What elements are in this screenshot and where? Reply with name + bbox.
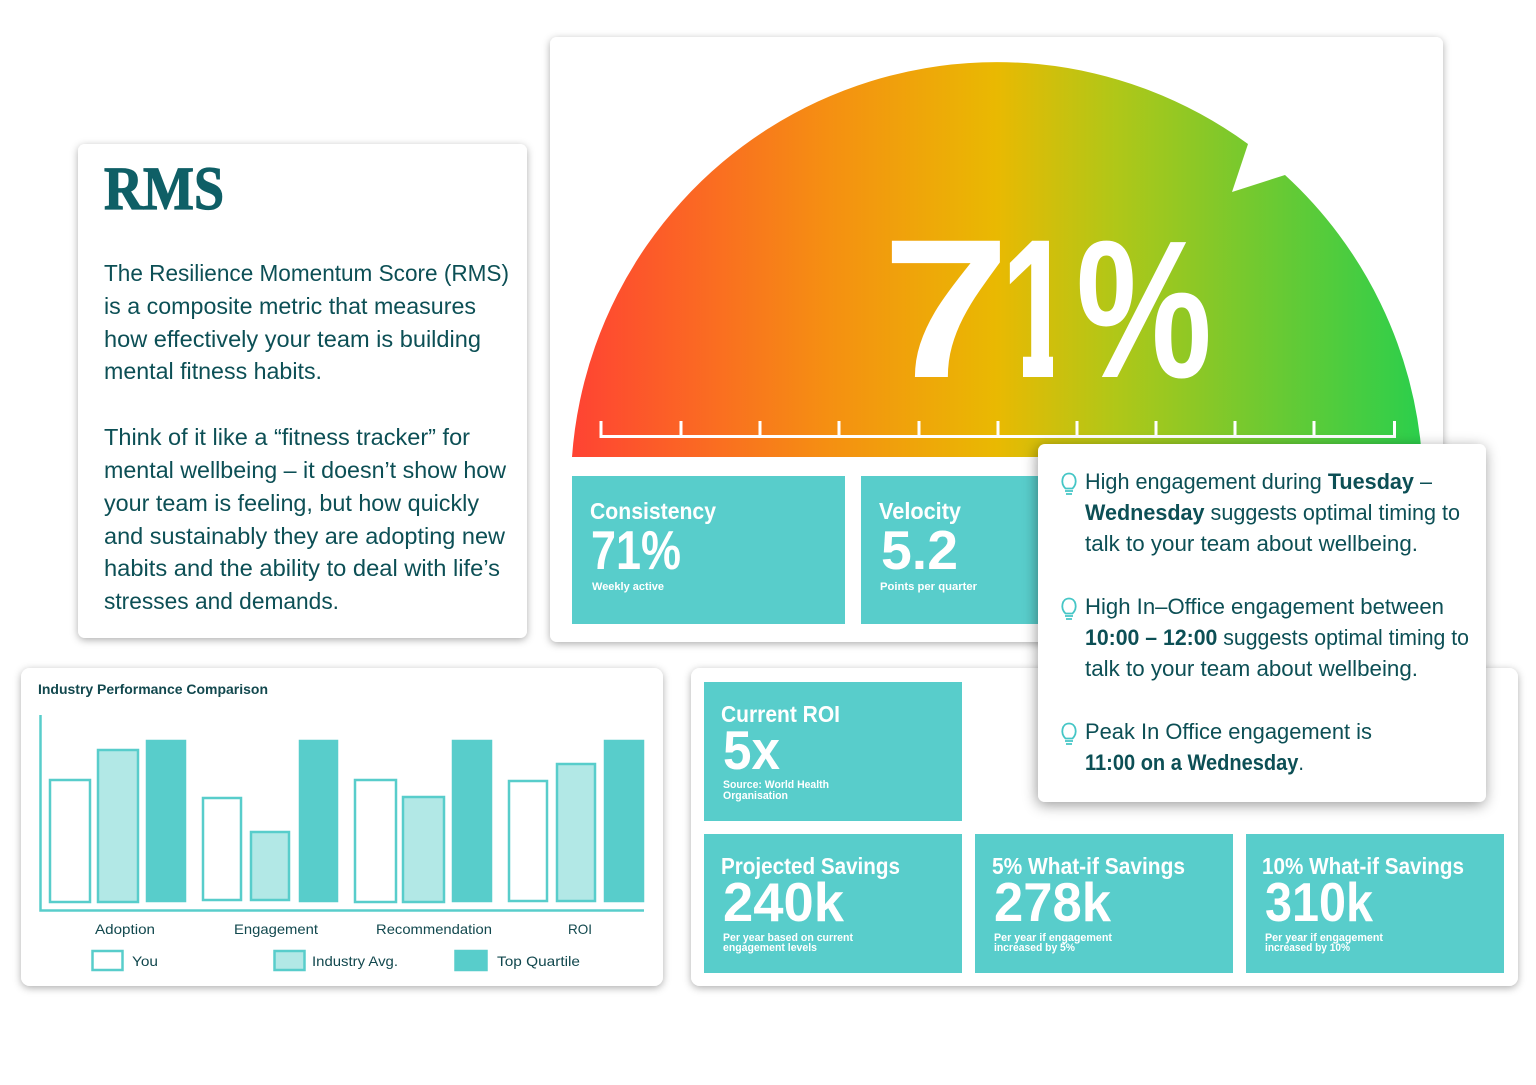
icon: lightbulb 2	[1062, 598, 1076, 619]
tile: current ROI: Organisation	[723, 790, 788, 802]
RMS description text	[104, 260, 509, 614]
chart card background	[21, 668, 663, 986]
tile: 5% what-if savings	[975, 834, 1233, 973]
chart legend: Industry Avg.	[312, 953, 398, 969]
RMS description text: habits and the ability to deal with life’s	[104, 555, 500, 581]
gauge arc	[572, 62, 1422, 457]
bar chart	[40, 715, 644, 910]
icon: lightbulb 3	[1062, 724, 1076, 744]
tile: projected savings	[704, 834, 962, 973]
tile: current ROI	[704, 682, 962, 821]
insight 3 text	[1085, 719, 1372, 775]
tile: velocity: 5.2	[881, 519, 958, 581]
category labels	[95, 921, 592, 937]
tile: projected savings: Projected Savings	[721, 853, 900, 879]
panel: RMS explanation	[78, 144, 527, 638]
tile: 10% what-if savings: increased by 10%	[1265, 942, 1350, 954]
tile: consistency: 71%	[591, 519, 681, 581]
tile: 5% what-if savings: 5% What-if Savings	[992, 853, 1185, 879]
chart legend	[92, 951, 580, 970]
RMS description text: mental wellbeing – it doesn’t show how	[104, 457, 506, 483]
category labels: Adoption	[95, 921, 155, 937]
panel: ROI and savings	[691, 668, 1518, 986]
RMS card background	[78, 144, 527, 638]
chart legend: You	[132, 953, 158, 969]
insight 2 text: talk to your team about wellbeing.	[1085, 656, 1418, 681]
tile: 10% what-if savings: 310k	[1265, 871, 1373, 933]
gauge value	[892, 240, 1208, 378]
category labels: Engagement	[234, 921, 318, 937]
tile: consistency: Consistency	[590, 498, 716, 524]
RMS heading: RMS	[104, 156, 224, 223]
panel: insights callout	[1038, 444, 1486, 802]
tile: 5% what-if savings: 278k	[994, 871, 1111, 933]
tile: current ROI: Source: World Health	[723, 779, 829, 791]
panel: gauge	[550, 37, 1443, 642]
insight 1 text: High engagement during Tuesday –	[1085, 469, 1432, 494]
insight 1 text	[1085, 469, 1460, 556]
insight 1 text: Wednesday suggests optimal timing to	[1085, 500, 1460, 525]
tile: consistency	[572, 476, 845, 624]
tile: projected savings: engagement levels	[723, 942, 817, 954]
gauge value: %	[1076, 200, 1212, 419]
savings card background	[691, 668, 1518, 986]
RMS description text: and sustainably they are adopting new	[104, 523, 505, 549]
RMS description text: mental fitness habits.	[104, 358, 322, 384]
panel: industry performance comparison	[21, 668, 663, 986]
tile: projected savings: 240k	[723, 871, 844, 933]
tile: consistency: Weekly active	[592, 581, 664, 593]
insight 1 text: talk to your team about wellbeing.	[1085, 531, 1418, 556]
gauge scale ticks	[601, 421, 1394, 436]
chart title: Industry Performance Comparison	[38, 682, 268, 697]
tile: velocity: Points per quarter	[880, 581, 978, 593]
chart legend: Top Quartile	[497, 953, 580, 969]
tile: velocity	[861, 476, 1134, 624]
category labels: ROI	[568, 921, 592, 937]
callout background	[1038, 444, 1486, 802]
insight 2 text: High In–Office engagement between	[1085, 594, 1444, 619]
tile: current ROI: Current ROI	[721, 701, 840, 727]
RMS description text: how effectively your team is building	[104, 326, 481, 352]
gauge value: 7	[882, 198, 1010, 419]
tile: 5% what-if savings: Per year if engagement	[994, 932, 1112, 944]
gauge value: 1	[1001, 198, 1073, 419]
RMS description text: stresses and demands.	[104, 588, 339, 614]
tile: projected savings: Per year based on current	[723, 932, 853, 944]
category labels: Recommendation	[376, 921, 492, 937]
tile: velocity: Velocity	[879, 498, 961, 524]
gauge card background	[550, 37, 1443, 642]
icon: lightbulb 1	[1062, 474, 1076, 494]
tile: 10% what-if savings	[1246, 834, 1504, 973]
insight 3 text: 11:00 on a Wednesday.	[1085, 750, 1304, 775]
tile: 10% what-if savings: 10% What-if Savings	[1262, 853, 1464, 879]
tile: 5% what-if savings: increased by 5%	[994, 942, 1075, 954]
insight 2 text	[1085, 594, 1469, 681]
insight 2 text: 10:00 – 12:00 suggests optimal timing to	[1085, 625, 1469, 650]
tile: current ROI: 5x	[723, 719, 780, 781]
RMS description text: is a composite metric that measures	[104, 293, 476, 319]
RMS description text: your team is feeling, but how quickly	[104, 490, 479, 516]
RMS description text: Think of it like a “fitness tracker” for	[104, 424, 470, 450]
RMS description text: The Resilience Momentum Score (RMS)	[104, 260, 509, 286]
tile: 10% what-if savings: Per year if engagement	[1265, 932, 1383, 944]
insight 3 text: Peak In Office engagement is	[1085, 719, 1372, 744]
